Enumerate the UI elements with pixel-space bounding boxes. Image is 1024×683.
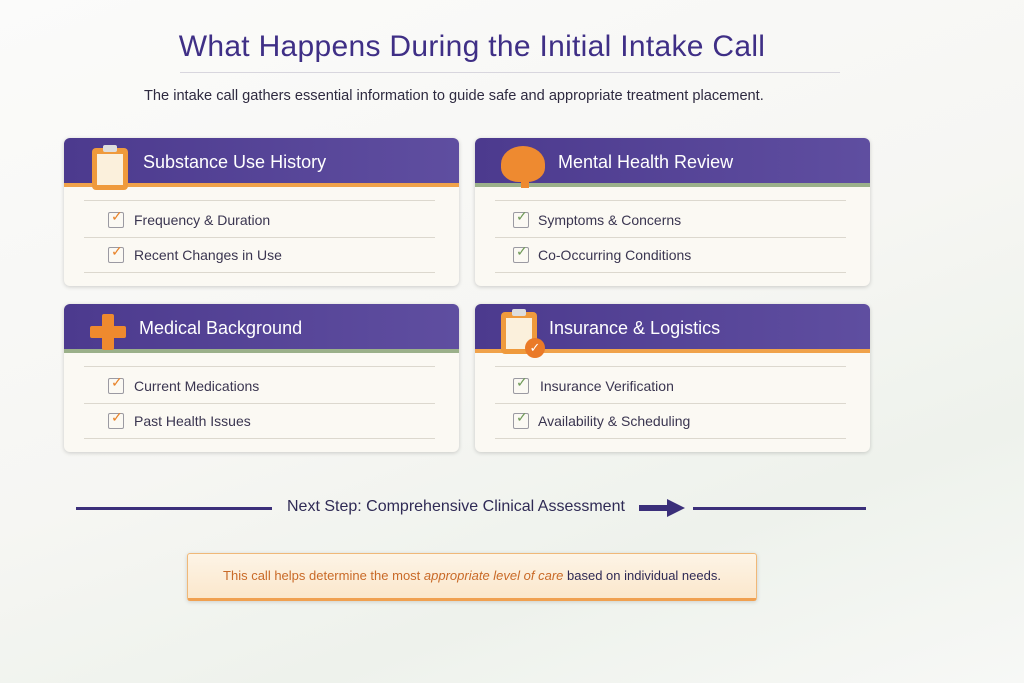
icon: clipboard bbox=[92, 148, 128, 190]
icon: clipboard check bbox=[501, 312, 537, 354]
item: Insurance Verification bbox=[540, 378, 674, 394]
next step banner: Next Step: Comprehensive Clinical Assessment bbox=[287, 498, 625, 515]
next step banner bbox=[76, 498, 866, 517]
item: Symptoms & Concerns bbox=[538, 212, 681, 228]
callout bbox=[187, 553, 757, 601]
item: ✓ bbox=[516, 208, 528, 224]
item: ✓ bbox=[111, 243, 123, 259]
arrow bbox=[639, 499, 685, 517]
heading: Insurance & Logistics bbox=[549, 318, 720, 338]
callout: This call helps determine the most appropriate level of care based on individual needs. bbox=[223, 568, 721, 583]
icon: clipboard check: ✓ bbox=[530, 340, 540, 355]
panel: insurance & logistics bbox=[475, 304, 870, 452]
item bbox=[108, 243, 282, 263]
heading: Substance Use History bbox=[143, 152, 326, 172]
item: Co-Occurring Conditions bbox=[538, 247, 691, 263]
item bbox=[513, 243, 691, 263]
item: ✓ bbox=[111, 409, 123, 425]
item bbox=[108, 374, 259, 394]
panel: substance use history bbox=[64, 138, 459, 286]
item bbox=[513, 208, 681, 228]
icon: brain bbox=[501, 146, 545, 182]
item: Availability & Scheduling bbox=[538, 413, 690, 429]
item: ✓ bbox=[516, 409, 528, 425]
item: ✓ bbox=[111, 208, 123, 224]
heading: Medical Background bbox=[139, 318, 302, 338]
heading: Mental Health Review bbox=[558, 152, 733, 172]
panel: medical background bbox=[64, 304, 459, 452]
item: Past Health Issues bbox=[134, 413, 251, 429]
item bbox=[513, 409, 690, 429]
item: ✓ bbox=[111, 374, 123, 390]
icon: medical cross bbox=[90, 314, 126, 350]
item: Recent Changes in Use bbox=[134, 247, 282, 263]
item bbox=[108, 208, 270, 228]
item: ✓ bbox=[516, 243, 528, 259]
item: ✓ bbox=[516, 374, 528, 390]
subtitle: The intake call gathers essential information to guide safe and appropriate treatment placement. bbox=[144, 88, 764, 104]
panel: mental health review bbox=[475, 138, 870, 286]
title: What Happens During the Initial Intake Call bbox=[179, 30, 765, 63]
item bbox=[108, 409, 251, 429]
item bbox=[513, 374, 674, 394]
item: Current Medications bbox=[134, 378, 259, 394]
item: Frequency & Duration bbox=[134, 212, 270, 228]
